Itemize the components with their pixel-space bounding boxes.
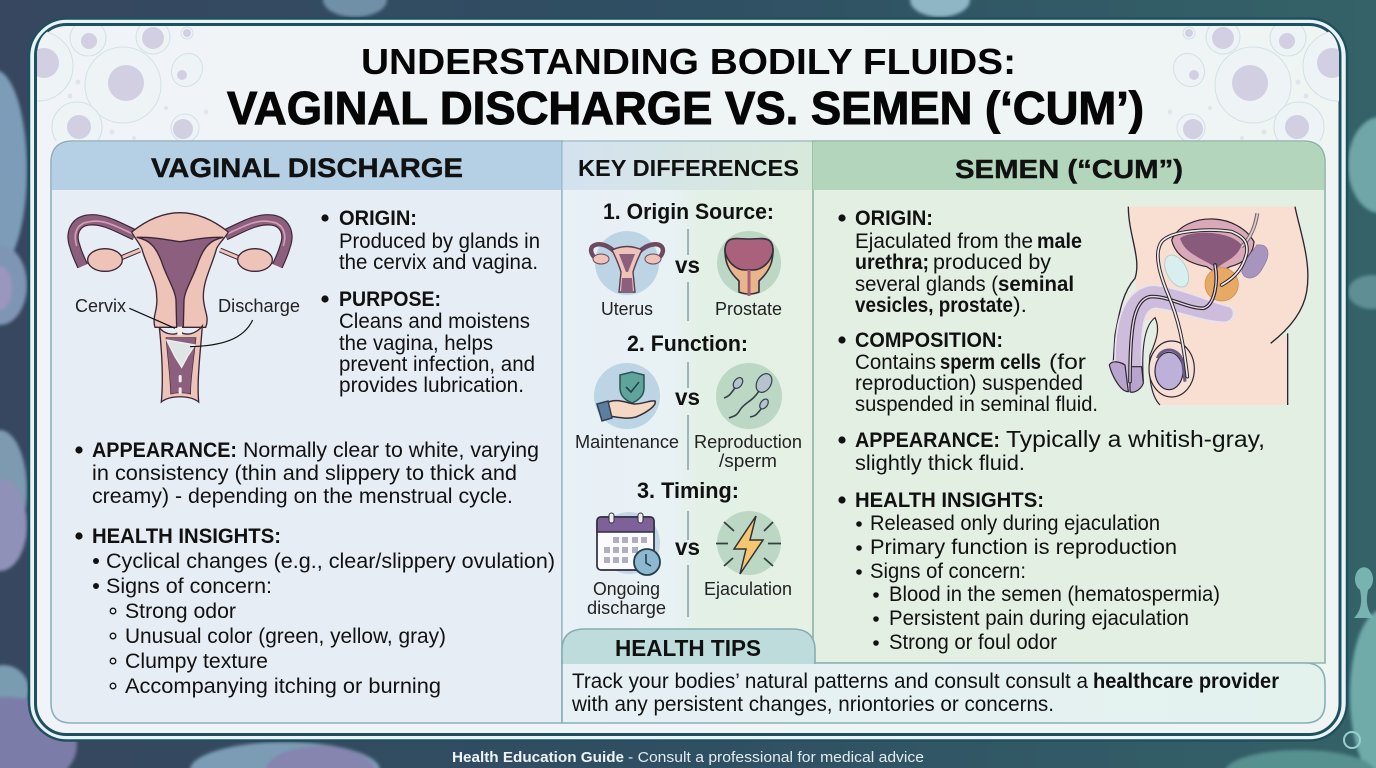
vs: vs (675, 534, 700, 560)
text: origin and purpose: ORIGIN: (339, 207, 417, 230)
icon: lightning bolt (716, 511, 781, 575)
text: health insights: Strong or foul odor (889, 630, 1057, 654)
label: ongoing discharge: Ongoing (593, 578, 660, 599)
panel header: key differences: KEY DIFFERENCES (578, 155, 799, 181)
text: composition: (for (1049, 350, 1086, 374)
text: health insights: HEALTH INSIGHTS: (855, 489, 1044, 512)
title: VAGINAL DISCHARGE VS. SEMEN (‘CUM’) (227, 82, 1144, 134)
text: health insights: Unusual color (green, yellow, gray) (125, 624, 446, 648)
text: appearance: slightly thick fluid. (855, 451, 1025, 475)
label: ongoing discharge (587, 578, 666, 618)
health tips text: Track your bodies’ natural patterns and consult consult a (572, 669, 1088, 693)
panel: health tips (562, 629, 1325, 723)
heading: origin source: 1. Origin Source: (603, 199, 774, 224)
text: composition (838, 329, 1098, 416)
text: appearance: creamy) - depending on the menstrual cycle. (92, 484, 513, 508)
uterus diagram with labels: Cervix (75, 295, 127, 316)
text: health insights: Clumpy texture (125, 649, 268, 673)
footer (452, 749, 924, 766)
health tips text: healthcare provider (1093, 670, 1279, 693)
text: composition: suspended in seminal fluid. (855, 392, 1098, 416)
icon: prostate (717, 231, 781, 296)
text: health insights: Primary function is reproduction (870, 535, 1177, 559)
panel header: semen: SEMEN (“CUM”) (955, 154, 1183, 184)
text: origin: several glands ( (855, 272, 999, 296)
text: origin and purpose: provides lubrication. (339, 373, 524, 397)
text: origin and purpose (321, 207, 540, 397)
label: maintenance: Maintenance (575, 431, 679, 452)
text: origin: male (1037, 230, 1082, 253)
title: UNDERSTANDING BODILY FLUIDS: (361, 41, 1016, 82)
heading: function: 2. Function: (627, 331, 748, 356)
uterus diagram with labels (73, 213, 300, 402)
vs: vs (675, 252, 700, 278)
panel header: vaginal discharge: VAGINAL DISCHARGE (151, 153, 463, 183)
text: health insights: Signs of concern: (106, 574, 272, 598)
text: origin and purpose: Cleans and moistens (339, 309, 530, 333)
text: composition: sperm cells (940, 351, 1041, 374)
panel: key differences (562, 141, 813, 663)
text: origin: seminal (998, 273, 1074, 296)
text: origin and purpose: the cervix and vagina. (339, 250, 538, 274)
text: appearance: Normally clear to white, varying (243, 438, 539, 462)
label: ejaculation: Ejaculation (704, 578, 792, 599)
text: health insights: Strong odor (125, 599, 236, 623)
heading: timing: 3. Timing: (637, 478, 739, 503)
footer: - Consult a professional for medical advice (628, 749, 924, 766)
panel: semen (813, 141, 1325, 663)
vs: vs (675, 384, 700, 410)
text: appearance (838, 426, 1265, 475)
male anatomy diagram (1109, 207, 1308, 405)
text: origin: ). (1013, 293, 1027, 317)
icon: sperm (716, 363, 782, 429)
text: origin and purpose: prevent infection, and (339, 352, 535, 376)
text: origin: ORIGIN: (855, 207, 933, 230)
text: appearance: Typically a whitish-gray, (1006, 426, 1265, 452)
text: health insights: HEALTH INSIGHTS: (92, 525, 281, 548)
label: prostate: Prostate (715, 298, 782, 319)
text: appearance: in consistency (thin and slippery to thick and (92, 461, 517, 485)
text: health insights (838, 489, 1220, 654)
text: origin and purpose: PURPOSE: (339, 288, 441, 311)
label: reproduction / sperm: Reproduction (694, 431, 802, 452)
panel header: vaginal discharge (52, 142, 562, 190)
health tips tab: HEALTH TIPS (615, 635, 761, 661)
text: origin: vesicles, prostate (855, 294, 1013, 317)
health tips text: with any persistent changes, nriontories or concerns. (571, 692, 1054, 716)
health tips text (571, 669, 1279, 716)
text: origin: urethra; (855, 251, 929, 274)
text: health insights: Blood in the semen (hematospermia) (889, 582, 1220, 606)
text: composition: COMPOSITION: (855, 329, 1003, 352)
text: health insights (75, 525, 555, 698)
footer: Health Education Guide (452, 749, 624, 766)
decorative cells top left (37, 26, 208, 141)
uterus diagram with labels: Discharge (218, 295, 300, 316)
health tips tab (562, 629, 815, 664)
text: origin (838, 207, 1082, 317)
text: origin and purpose: Produced by glands in (339, 229, 540, 253)
text: appearance (75, 438, 539, 508)
text: health insights: Persistent pain during ejaculation (889, 606, 1189, 630)
text: appearance: APPEARANCE: (92, 439, 237, 462)
text: origin and purpose: the vagina, helps (339, 331, 493, 355)
label: uterus: Uterus (601, 298, 653, 319)
text: health insights: Released only during ejaculation (870, 511, 1160, 535)
label: ongoing discharge: discharge (587, 597, 666, 618)
icon: calendar with clock (597, 512, 660, 575)
text: composition: reproduction) suspended (855, 371, 1083, 395)
label: reproduction / sperm (694, 431, 802, 471)
text: appearance: APPEARANCE: (855, 429, 1000, 452)
title (227, 41, 1144, 134)
text: health insights: Cyclical changes (e.g., clear/slippery ovulation) (106, 549, 555, 573)
text: composition: Contains (855, 350, 936, 374)
icon: uterus (591, 231, 663, 295)
panel: vaginal discharge (51, 141, 562, 723)
text: origin: produced by (933, 250, 1051, 274)
text: health insights: Signs of concern: (870, 559, 1026, 583)
text: health insights: Accompanying itching or burning (125, 674, 441, 698)
panel header: semen (813, 142, 1324, 190)
text: origin: Ejaculated from the (855, 229, 1033, 253)
decorative cells top right (1168, 26, 1339, 141)
icon: hand with shield (594, 363, 660, 429)
panel header: key differences (563, 142, 813, 190)
label: reproduction / sperm: /sperm (719, 450, 777, 471)
